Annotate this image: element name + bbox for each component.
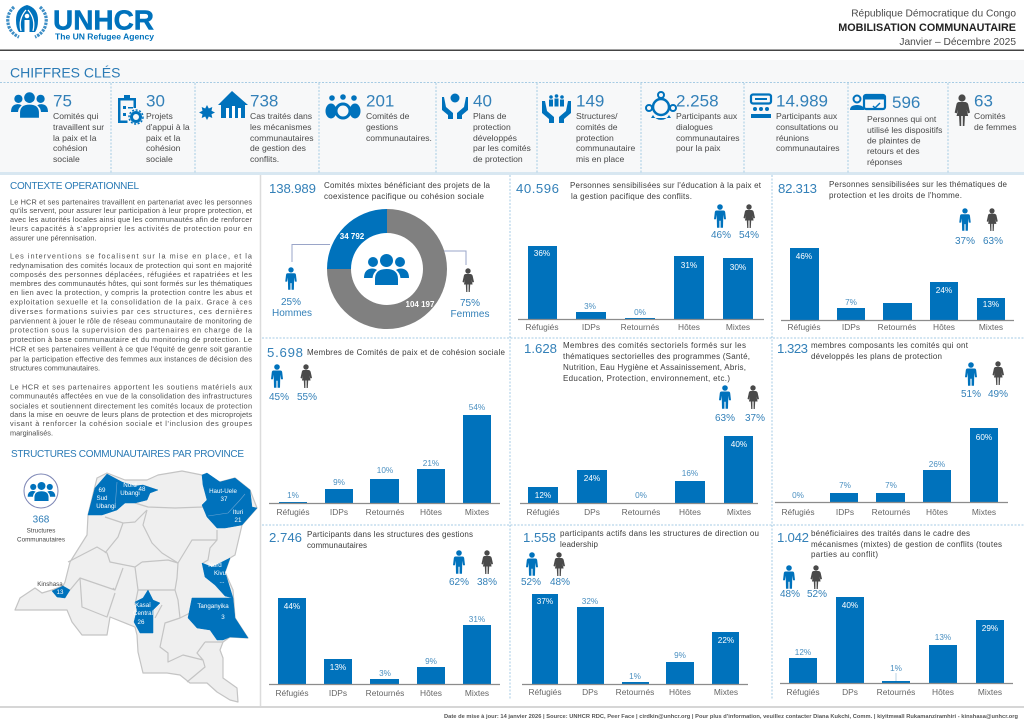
key figure: 738 cas traités: les mécanismes [250,122,312,132]
panel: 1.323: 49% [988,389,1008,400]
panel: 138.989 donut: 138.989 [269,181,316,196]
callout: total structures [17,474,65,544]
bar chart: 12% [795,648,811,657]
bar chart: Réfugiés [525,322,559,332]
footer: Date de mise à jour: 14 janvier 2026 | Source: UNHCR RDC, Peer Face | cirdkin@unhcr.org | Pour plus d'information, veuillez contacter Diana Kukchi, Comm. | kiyitmwall Rukamanziramhiri - kinshasa@unhcr.org [444,714,1019,720]
key figure: 2.258 participants dialogues: Participants aux [676,111,738,121]
panel: 1.042: parties au conflit) [811,550,878,559]
bar chart: Mixtes [727,507,751,517]
bar chart: IDPs [582,322,600,332]
key figure: 201 comités de gestion: gestions [366,122,398,132]
key figure: 14.989 participants consultations: consultations ou [776,122,838,132]
bar chart: 13% [330,663,346,672]
bar chart: DPs [582,687,598,697]
bar chart: 7% [839,481,851,490]
bar chart [518,246,764,332]
key figure: 149 structures: communautaire [576,143,635,153]
key figure: 149 structures: comités de [576,122,618,132]
key figure: 738 cas traités: conflits. [250,154,279,164]
key figure: 596 personnes: 596 [892,93,920,112]
key figure: 201 comités de gestion: 201 [366,92,394,110]
panel: 5.698: 55% [297,392,317,403]
panel: 2.746 [269,530,500,698]
bar chart: Réfugiés [276,507,310,517]
bar chart [780,597,1013,697]
key figure: 30 projets: cohésion [146,143,181,153]
key figure: 596 personnes: retours et des [867,146,920,156]
callout: total structures: Structures [27,528,55,534]
panel: 1.628: Education, Protection, environnement, etc.) [563,374,730,383]
bar chart: Hôtes [932,687,954,697]
bar chart: Mixtes [465,688,489,698]
map labels: Tanganyika [197,603,229,610]
bar chart [269,598,500,698]
panel: 1.042 [777,529,1013,697]
key figure: 40 plans de protection: développés [473,133,517,143]
panel: 1.042: 52% [807,589,827,600]
panel: 82.313: 37% [955,236,975,247]
key figure: 63 comités de femmes [955,92,1017,132]
panel: 1.323 [775,341,1008,517]
panel: 1.323: développés les plans de protection [811,352,942,361]
bar chart: 1% [629,672,641,681]
panel: 1.628: 1.628 [524,341,557,356]
bar chart: 9% [425,657,437,666]
bar chart: 31% [681,261,697,270]
text block: sociales et soutiennent directement les comités locaux de protection [10,402,252,410]
bar chart: 1% [890,664,902,673]
text block: HCR et ses partenaires veillent à ce que l'équité de genre soit garantie [10,344,252,354]
key figure: 738 cas traités: de gestion des [250,143,306,153]
key figure: 596 personnes [850,93,942,167]
heading: CHIFFRES CLÉS [10,64,120,80]
header: report title: République Démocratique du Congo [851,8,1016,20]
text block: avec les autorités locales ainsi que les communautés afin de renforcer [10,215,253,224]
text block: visant à renforcer la cohésion sociale et l'inclusion des groupes [10,419,252,428]
key figure: 63 comités de femmes: 63 [974,92,993,110]
map labels: Ubangi [120,490,140,497]
map labels: 48 [139,486,146,493]
map labels: 26 [138,619,145,626]
bar chart: IDPs [330,507,348,517]
map labels: ... [219,578,225,585]
icon: UNHCR wreath emblem [8,5,46,37]
bar chart [775,428,1008,517]
panel: 1.628: Nutrition, Eau Hygiène et Assainissement, Abris, [563,363,746,372]
key figure: 149 structures: protection [576,133,614,143]
text block [10,198,253,438]
key figure: 30 projets: sociale [146,154,173,164]
bar chart: 29% [982,624,998,633]
panel: 1.042: 48% [780,589,800,600]
map labels: 21 [235,517,242,524]
bar chart: 10% [377,466,393,475]
gender: hommes [272,267,312,319]
key figure: 201 comités de gestion: Comités de [366,111,410,121]
panel: 1.628: 63% [715,413,735,424]
panel: 2.746: 38% [477,577,497,588]
bar chart: Retournés [621,322,659,332]
bar chart: 0% [792,491,804,500]
panel: 40.596: 40.596 [516,181,559,196]
panel: 5.698 [267,345,506,517]
key figure: 30 projets: Projets [146,111,173,121]
text block: en lien avec la protection, y compris la protection contre les abus et [10,288,252,297]
map labels: Kinshasa [37,581,63,588]
text block: dans la mise en oeuvre de leurs plans de protection et des microprojets [10,410,252,419]
bar chart: Hôtes [926,507,948,517]
bar chart: 13% [935,633,951,642]
key figure: 201 comités de gestion [326,92,432,143]
panel: 1.558: 1.558 [523,530,556,545]
bar chart: 24% [584,474,600,483]
map labels: Haut-Uele [209,488,237,495]
panel: 40.596: 46% [711,230,731,241]
bar chart: Réfugiés [275,688,309,698]
text block: protection à base communautaire et du monitoring de protection. Le [10,335,252,344]
map labels: 3 [221,614,225,621]
key figure: 738 cas traités: Cas traités dans [250,111,312,121]
panel: 82.313 [778,180,1014,332]
bar chart: Mixtes [978,687,1002,697]
key figure: 14.989 participants consultations: 14.989 [776,92,828,110]
key figure: 596 personnes: Personnes qui ont [867,114,937,124]
map labels: Sud [96,495,108,502]
text block: protection sous la supervision des partenaires en charge de la [10,326,253,334]
bar chart: Réfugiés [528,687,562,697]
panel: 138.989 donut: coexistence pacifique ou cohésion sociale [324,192,485,201]
tagline: The UN Refugee Agency [55,32,154,42]
panel: 1.558: leadership [560,540,599,549]
bar chart: Hôtes [669,687,691,697]
text block: Les interventions se focalisent sur la mise en place, et la [10,252,253,260]
bar chart [269,403,500,517]
panel: 1.628 [520,341,765,517]
bar chart: Retournés [877,687,915,697]
key figure: 40 plans de protection [442,92,531,164]
panel: 5.698: 45% [269,392,289,403]
panel: 2.746: communautaires [307,541,367,550]
bar chart: Réfugiés [787,322,821,332]
key figure: 149 structures: Structures/ [576,111,618,121]
bar chart [520,436,758,517]
panel: 2.746: Participants dans les structures des gestions [307,530,473,539]
header: report title: Janvier – Décembre 2025 [899,37,1016,48]
gender: femmes: Femmes [451,309,489,320]
bar chart: DPs [842,687,858,697]
callout: total structures: Communautaires [17,536,65,544]
bar chart: Hôtes [933,322,955,332]
heading: CONTEXTE OPERATIONNEL [10,181,139,192]
key figure: 596 personnes: réponses [867,157,902,167]
panel: 1.558: 52% [521,577,541,588]
key figure: 2.258 participants dialogues [646,92,740,153]
text block: assurer une pérennisation. [10,234,96,242]
map labels: 69 [99,487,106,494]
text block: structures communautaires. [10,364,100,372]
text block: exploitation sexuelle et la consolidation de la paix. Grace à ces [10,298,252,306]
key figure: 738 cas traités [199,91,314,164]
panel: 82.313: protection et les droits de l'homme. [829,191,962,200]
key figure: 75 comités: travaillent sur [53,122,104,132]
key figure: 2.258 participants dialogues: pour la paix [676,143,721,153]
panel: 138.989 donut: Comités mixtes bénéficiant des projets de la [324,181,491,190]
bar chart: 16% [682,469,698,478]
key figure: 40 plans de protection: protection [473,122,511,132]
key figure: 75 comités [11,92,104,164]
key figure: 75 comités: sociale [53,154,80,164]
bar chart: 40% [842,601,858,610]
bar chart: 31% [469,615,485,624]
panel: 1.323: 1.323 [777,341,808,356]
key figure: 40 plans de protection: par les comités [473,143,531,153]
bar chart: IDPs [842,322,860,332]
key figure: 2.258 participants dialogues: 2.258 [676,92,719,110]
panel: 1.628: thématiques sectorielles des programmes (Santé, [563,352,750,361]
panel: contexte opérationnel [10,181,253,438]
bar chart: 13% [983,300,999,309]
bar chart: 54% [469,403,485,412]
map labels: Nord [208,562,222,569]
key figure: 201 comités de gestion: communautaires. [366,133,432,143]
panel: 1.323: membres composants les comités qui ont [811,341,969,350]
text block: marginalisés. [10,428,53,438]
bar chart: Hôtes [420,507,442,517]
bar chart: Réfugiés [526,507,560,517]
bar chart: Retournés [366,688,404,698]
header: logo [8,4,154,42]
panel: 2.746: 2.746 [269,530,302,545]
bar chart: Retournés [616,687,654,697]
bar chart: 9% [333,478,345,487]
heading: structures par province: STRUCTURES COMMUNAUTAIRES PAR PROVINCE [11,449,244,460]
bar chart: 32% [582,597,598,606]
bar chart: Retournés [622,507,660,517]
key figure: 14.989 participants consultations [751,92,840,153]
panel: 40.596: la gestion pacifique des conflits. [571,192,692,201]
bar chart: 22% [718,636,734,645]
text block: parviennent à jouer le rôle de réseau communautaire de monitoring de [10,316,252,326]
key figure: 75 comités: cohésion [53,143,88,153]
map labels: 13 [57,589,64,596]
key figure: 738 cas traités: 738 [250,92,278,110]
key figure: 14.989 participants consultations: Participants aux [776,111,838,121]
header: report title: MOBILISATION COMMUNAUTAIRE [838,22,1016,34]
key figure: 738 cas traités: communautaires [250,133,314,143]
bar chart: Hôtes [678,322,700,332]
gender: femmes [451,268,489,320]
bar chart: 30% [730,263,746,272]
text block: membres des communautés hôtes, qui sont formés sur les thématiques [10,279,252,288]
bar chart: 37% [537,597,553,606]
callout: total structures: 368 [33,514,50,526]
panel: 1.042: mécanismes (mixtes) de gestion de conflits (toutes [811,540,1002,549]
panel: chiffres clés [0,60,1024,175]
bar chart: 0% [635,491,647,500]
bar chart: 7% [885,481,897,490]
key figure: 75 comités: Comités qui [53,111,98,121]
map labels: Ituri [233,509,243,516]
bar chart: 60% [976,433,992,442]
text block: redynamisation des comités locaux de protection qui sont en majorité [10,261,252,270]
logotype: UNHCR [53,4,154,36]
bar chart: 36% [534,249,550,258]
key figure: 63 comités de femmes: Comités [974,111,1006,121]
panel: 82.313: 63% [983,236,1003,247]
panel: 1.558: participants actifs dans les structures de direction ou [560,529,759,538]
text block: leurs capacités à s'approprier les activités de protection pour en [10,224,252,233]
key figure: 40 plans de protection: Plans de [473,111,507,121]
panel: 1.558 [521,529,759,697]
text block: qu'ils servent, pour assurer leur participation à leur propre protection, et [10,206,252,215]
key figure: 596 personnes: utilisé les dispositifs [867,125,942,135]
text block: communautés affectées en vue de la consolidation des infrastructures [10,392,252,400]
panel: 2.746: 62% [449,577,469,588]
bar chart: IDPs [329,688,347,698]
map labels: Ubangi [96,503,116,510]
bar chart: Retournés [872,507,910,517]
bar chart: 24% [936,286,952,295]
key figure: 149 structures [542,92,635,164]
key figure: 2.258 participants dialogues: dialogues [676,122,713,132]
text block: Le HCR et ses partenaires apportent les soutiens matériels aux [10,382,252,392]
gender: hommes: Hommes [272,308,312,319]
key figure: 75 comités: la paix et la [53,133,97,143]
text block: Le HCR et ses partenaires travaillent en partenariat avec les personnes [10,198,252,206]
map labels: Kasaï [135,602,151,609]
key figure: 30 projets: d'appui à la [146,122,190,132]
key figure: 149 structures: mis en place [576,154,624,164]
bar chart: DPs [584,507,600,517]
panel: 1.628: 37% [745,413,765,424]
gender: femmes: 75% [460,298,480,309]
bar chart: 7% [845,298,857,307]
panel: 1.323: 51% [961,389,981,400]
panel: 5.698: Membres de Comités de paix et de cohésion sociale [307,348,506,357]
donut chart: 104 197 [406,300,435,309]
bar chart: 1% [287,491,299,500]
key figure: 40 plans de protection: de protection [473,154,523,164]
text block: diverses formations suivies par ces structures, ces dernières [10,307,252,316]
key figure: 14.989 participants consultations: réunions [776,133,809,143]
panel: 5.698: 5.698 [267,345,303,360]
bar chart: 3% [584,302,596,311]
bar chart: Mixtes [465,507,489,517]
bar chart: 3% [379,669,391,678]
panel: 1.628: Membres des comités sectoriels formés sur les [563,341,746,350]
bar chart: Retournés [878,322,916,332]
key figure: 30 projets: 30 [146,92,165,110]
bar chart: 12% [535,491,551,500]
header: report title [838,8,1016,48]
text block: par la participation effective des femmes aux instances de décision des [10,354,252,364]
key figure: 14.989 participants consultations: communautaires [776,143,840,153]
bar chart: Mixtes [979,322,1003,332]
bar chart: 26% [929,460,945,469]
donut chart [327,209,447,329]
key figure: 596 personnes: de plaintes de [867,136,921,146]
bar chart: 40% [731,440,747,449]
key figure: 149 structures: 149 [576,92,604,110]
panel: 40.596: 54% [739,230,759,241]
panel: 82.313: 82.313 [778,181,817,196]
panel: 40.596: Personnes sensibilisées sur l'éducation à la paix et [570,181,762,190]
bar chart: Mixtes [972,507,996,517]
bar chart: Mixtes [714,687,738,697]
key figure: 75 comités: 75 [53,92,72,110]
map labels: Kivu [214,570,227,577]
text block: composés des personnes déplacées, réfugiées et rapatriées et les [10,270,252,279]
gender: hommes: 25% [281,297,301,308]
panel: 1.042: bénéficiaires des traités dans le cadre des [811,529,970,538]
panel: 1.042: 1.042 [777,530,809,545]
bar chart: Mixtes [726,322,750,332]
map labels: Central [133,610,153,617]
bar chart [781,248,1014,332]
bar chart: 21% [423,459,439,468]
panel: 82.313: Personnes sensibilisées sur les thématiques de [829,180,1008,189]
bar chart: Réfugiés [781,507,815,517]
panel: 40.596 [516,181,764,332]
map labels [37,482,243,626]
bar chart: Hôtes [420,688,442,698]
panel: 138.989 donut [269,181,491,329]
bar chart: Hôtes [679,507,701,517]
map labels: Nord [123,482,137,489]
bar chart: 0% [634,308,646,317]
key figure: 63 comités de femmes: de femmes [974,122,1017,132]
bar chart: 9% [674,651,686,660]
bar chart: 46% [796,252,812,261]
key figure: 30 projets [118,92,190,164]
donut chart: 34 792 [340,232,365,241]
key figure: 40 plans de protection: 40 [473,92,492,110]
bar chart: IDPs [836,507,854,517]
map labels: 37 [221,496,228,503]
bar chart [522,594,748,697]
key figure: 30 projets: paix et la [146,133,181,143]
bar chart: Retournés [366,507,404,517]
bar chart: 44% [284,602,300,611]
panel: 1.558: 48% [550,577,570,588]
bar chart: Réfugiés [786,687,820,697]
key figure: 2.258 participants dialogues: communautaires [676,133,740,143]
map: DRC provinces [15,471,257,702]
